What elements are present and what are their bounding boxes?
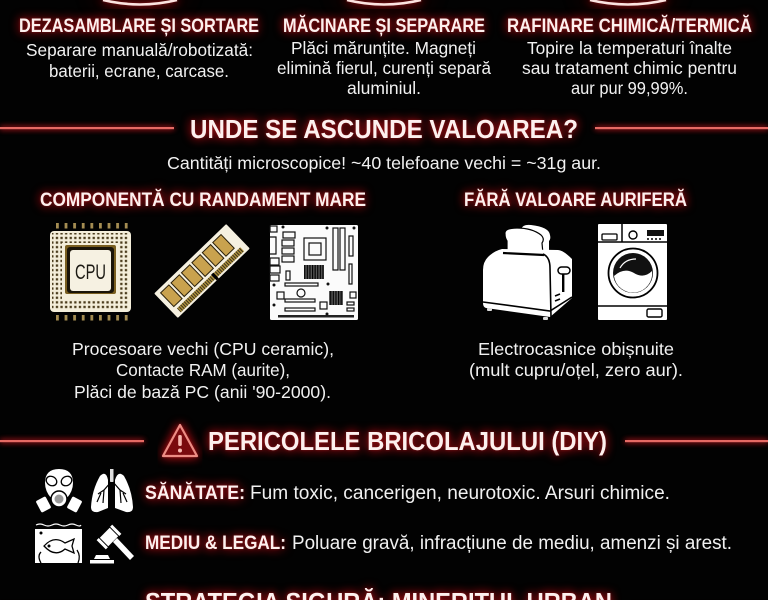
step circle bottom arc [332, 0, 436, 7]
step description: elimină fierul, curenți separă [277, 58, 491, 78]
icon: CPU: CPU [75, 261, 106, 284]
icon: gas mask [36, 469, 82, 513]
text: environment and legal danger: MEDIU & LEGAL: [145, 533, 286, 554]
step heading: MĂCINARE ȘI SEPARARE [283, 15, 485, 37]
text: high-yield description: Procesoare vechi (CPU ceramic), [72, 339, 334, 359]
section divider right [625, 440, 768, 442]
icon: toaster [483, 225, 572, 320]
panel: step grinding [277, 0, 491, 98]
icon: washing machine [598, 224, 667, 320]
heading: DIY dangers: PERICOLELE BRICOLAJULUI (DIY) [208, 426, 607, 456]
text: high-yield description: Contacte RAM (aurite), [116, 360, 290, 380]
step description: aur pur 99,99%. [571, 78, 688, 98]
step description: Plăci mărunțite. Magneți [291, 38, 476, 58]
step circle bottom arc [575, 0, 680, 7]
icon: RAM module [154, 224, 250, 318]
text: no gold description: Electrocasnice obișnuite [478, 339, 674, 359]
icon: CPU [50, 223, 131, 320]
step description [277, 38, 491, 98]
icon: gavel [90, 525, 134, 564]
step description: baterii, ecrane, carcase. [49, 61, 229, 81]
icon: lungs [91, 469, 133, 512]
heading: no gold value: FĂRĂ VALOARE AURIFERĂ [464, 189, 687, 211]
icon: polluted water fish [35, 524, 82, 563]
section divider left [0, 440, 144, 442]
text: environment and legal danger: Poluare gravă, infracțiune de mediu, amenzi și arest. [292, 533, 732, 554]
step description: sau tratament chimic pentru [522, 58, 737, 78]
step circle bottom arc [88, 0, 190, 7]
step heading: DEZASAMBLARE ȘI SORTARE [19, 16, 259, 37]
heading: high-yield components: COMPONENTĂ CU RANDAMENT MARE [40, 189, 366, 211]
step description: aluminiul. [347, 78, 421, 98]
text: health danger: Fum toxic, cancerigen, neurotoxic. Arsuri chimice. [250, 483, 670, 504]
step description: Separare manuală/robotizată: [26, 40, 253, 60]
heading: where the value hides: UNDE SE ASCUNDE VALOAREA? [190, 114, 578, 144]
section divider right [595, 127, 768, 129]
step description: Topire la temperaturi înalte [527, 38, 732, 58]
icon: motherboard [270, 225, 358, 320]
step description [26, 40, 253, 81]
text: no gold description [469, 339, 683, 380]
text: high-yield description: Plăci de bază PC (anii '90-2000). [74, 382, 331, 402]
subtitle: Cantități microscopice! ~40 telefoane vechi = ~31g aur. [167, 153, 601, 173]
icon: warning triangle [163, 425, 197, 456]
text: no gold description: (mult cupru/oțel, zero aur). [469, 360, 683, 380]
text: health danger: SĂNĂTATE: [145, 482, 245, 504]
section divider left [0, 127, 174, 129]
text: high-yield description [72, 339, 334, 402]
step description [522, 38, 737, 98]
panel: step dismantling [19, 0, 259, 81]
panel: step refining [507, 0, 752, 98]
